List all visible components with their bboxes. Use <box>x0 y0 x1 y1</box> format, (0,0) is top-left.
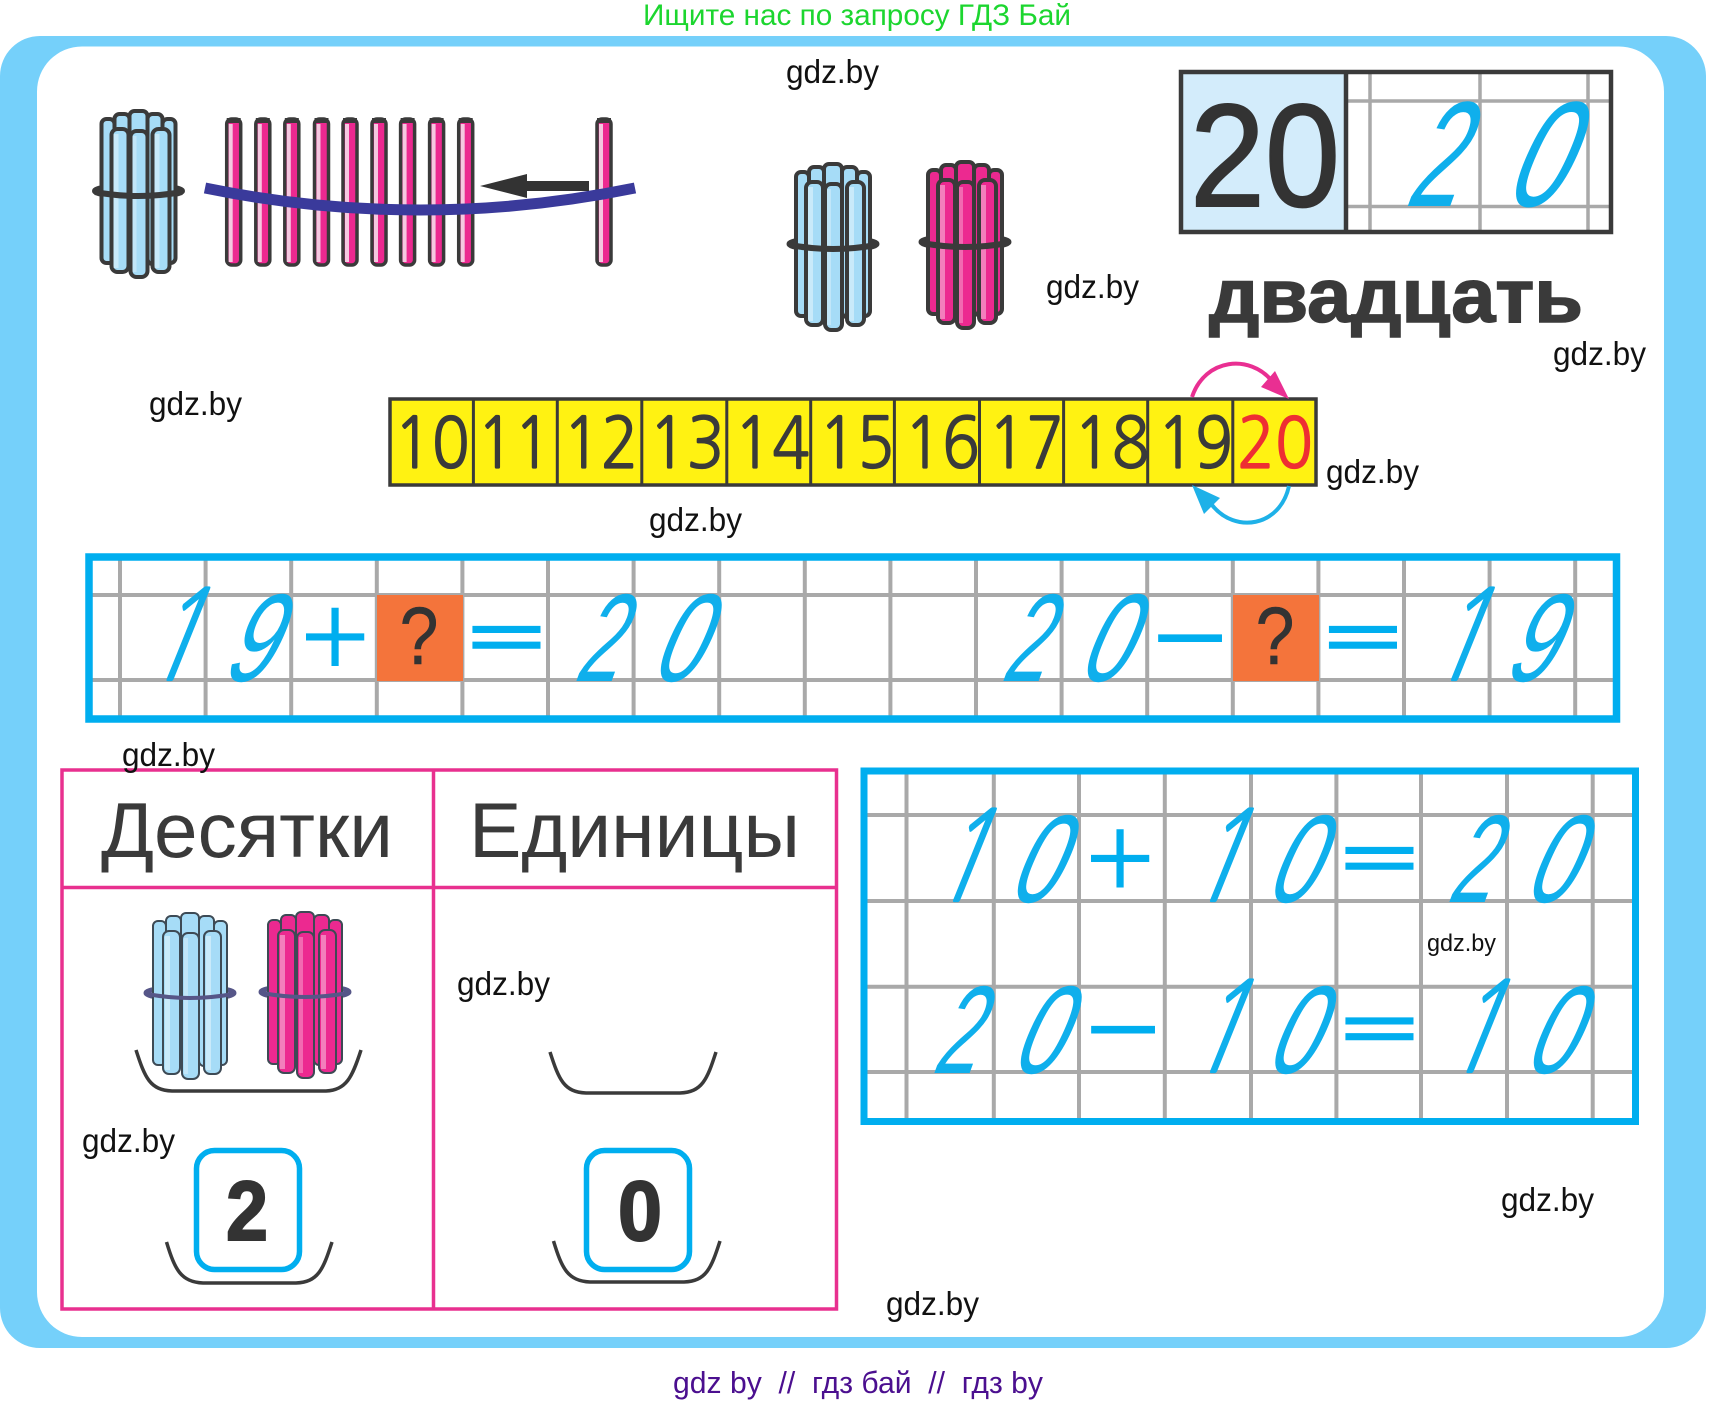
rods illustration: bundle, ten loose rods, arrow <box>94 111 635 277</box>
equation: 20 - ? = 19: − <box>1152 564 1228 713</box>
icon: pink bundle <box>921 162 1009 328</box>
equation: 10 + 10 = 20 <box>919 789 1619 930</box>
grid lines <box>1346 72 1611 232</box>
icon: single pink rod <box>597 118 611 265</box>
bracket under digit 0 <box>554 1241 720 1282</box>
panel border <box>89 557 1616 719</box>
strip numbers: 20 <box>1237 409 1313 479</box>
heading: units: Единицы <box>469 786 800 874</box>
equation: 20 - ? = 19: 2 <box>989 568 1084 709</box>
watermarks: gdz.by <box>1553 335 1646 372</box>
bracket under bundles <box>136 1050 361 1091</box>
equation: 19 + ? = 20: + <box>300 568 370 705</box>
equation: 20 - 10 = 10: 1 <box>1176 966 1280 1091</box>
grid lines <box>864 771 1635 1121</box>
icon: blue bundle of ten <box>94 111 182 277</box>
icon: nine pink rods <box>227 118 473 265</box>
arrow: blue backward hop <box>1192 485 1289 523</box>
watermarks: gdz.by <box>649 501 742 538</box>
watermarks: gdz.by <box>1326 453 1419 490</box>
grid lines <box>89 557 1616 719</box>
equation: 20 - 10 = 10: 2 <box>920 960 1015 1101</box>
equation: 20 - ? = 19: 0 <box>1063 569 1173 708</box>
orange unknown box, right <box>1233 595 1319 681</box>
equation: 20 - 10 = 10: 0 <box>1250 961 1361 1100</box>
equation: 10 + 10 = 20: 2 <box>1435 789 1530 930</box>
strip numbers: 19 <box>1157 409 1233 479</box>
equation: 10 + 10 = 20: 1 <box>1176 795 1280 920</box>
strip numbers: 13 <box>649 409 725 479</box>
equation: 10 + 10 = 20: 0 <box>1509 790 1619 929</box>
watermarks: gdz.by <box>82 1122 175 1159</box>
equation: 20 - 10 = 10: − <box>1085 956 1161 1104</box>
panel: equations 10 + 10 = 20 and 20 - 10 = 10 <box>864 771 1636 1122</box>
word: twenty: двадцать <box>1209 254 1583 339</box>
two bundles: blue and pink <box>789 162 1009 330</box>
equation: 19 + ? = 20: 9 <box>207 569 318 708</box>
equation: 20 - 10 = 10: 0 <box>996 961 1106 1100</box>
strip numbers: 11 <box>477 409 551 479</box>
icon: blue bundle <box>789 164 877 330</box>
equation: 20 - 10 = 10: 0 <box>1509 961 1619 1100</box>
curved purple stroke <box>205 188 635 210</box>
bracket under digit 2 <box>166 1242 332 1283</box>
strip numbers: 12 <box>563 409 639 479</box>
equation: 20 - ? = 19: 9 <box>1489 569 1599 708</box>
number card 20 <box>1181 71 1619 239</box>
orange unknown box, left <box>377 595 463 681</box>
strip numbers: 18 <box>1074 409 1150 479</box>
equation: 19 + ? = 20: 0 <box>636 569 746 708</box>
equation: 20 - 10 = 10: = <box>1342 992 1417 1063</box>
card: digit 2: 2 <box>226 1164 268 1258</box>
strip background <box>390 399 1316 485</box>
handwritten number: 2 <box>1391 71 1504 238</box>
equation: 20 - 10 = 10 <box>920 956 1619 1104</box>
panel: tens and units table <box>62 770 836 1309</box>
equation: 20 - 10 = 10: 1 <box>1433 966 1536 1091</box>
panel: equations 19 + ? = 20 and 20 - ? = 19 <box>89 557 1616 719</box>
strip numbers: 14 <box>734 409 810 479</box>
card: digit 2 <box>196 1150 300 1270</box>
watermarks: gdz.by <box>1046 268 1139 305</box>
equation: 19 + ? = 20 <box>133 568 746 709</box>
strip numbers: 15 <box>819 409 895 479</box>
handwritten number: 0 <box>1486 71 1619 239</box>
arrow: pink forward hop <box>1192 364 1289 399</box>
watermarks: gdz.by <box>1427 930 1496 957</box>
printed 20 cell <box>1182 72 1346 232</box>
equation: 10 + 10 = 20: 0 <box>1250 790 1361 929</box>
card frame <box>1181 72 1611 232</box>
watermarks: gdz.by <box>886 1285 979 1322</box>
equation: 19 + ? = 20: = <box>469 601 544 672</box>
card: digit 0: 0 <box>618 1164 662 1258</box>
card: digit 0 <box>586 1150 690 1270</box>
strip numbers <box>394 409 1313 479</box>
watermarks: gdz.by <box>786 53 879 90</box>
panel border <box>864 771 1636 1122</box>
equation: 10 + 10 = 20: + <box>1085 790 1155 926</box>
equation: 20 - ? = 19: ? <box>1256 591 1294 682</box>
equation: 10 + 10 = 20: 0 <box>993 790 1103 929</box>
handwritten number <box>1391 71 1619 239</box>
equation: 20 - ? = 19 <box>989 564 1599 713</box>
footer text: gdz by // гдз бай // гдз by <box>673 1365 1043 1400</box>
printed number: 20 <box>1190 74 1340 237</box>
equation: 19 + ? = 20: ? <box>400 591 438 682</box>
equation: 10 + 10 = 20: = <box>1342 822 1417 893</box>
arrow pointing left <box>480 174 589 198</box>
strip numbers: 10 <box>394 409 470 479</box>
watermarks: gdz.by <box>122 736 215 773</box>
strip numbers: 16 <box>904 409 980 479</box>
strip numbers: 17 <box>988 409 1064 479</box>
equation: 19 + ? = 20: 1 <box>133 574 236 699</box>
bracket in units column <box>550 1052 716 1093</box>
watermarks: gdz.by <box>457 965 550 1002</box>
watermarks: gdz.by <box>1501 1181 1594 1218</box>
table lines <box>62 770 836 1309</box>
equation: 20 - ? = 19: = <box>1325 601 1401 672</box>
icon: two bundles in tens column <box>146 912 349 1079</box>
equation: 10 + 10 = 20: 1 <box>919 795 1023 920</box>
heading: tens: Десятки <box>101 786 393 874</box>
watermarks: gdz.by <box>149 385 242 422</box>
number strip 10 to 20 <box>390 364 1316 523</box>
equation: 19 + ? = 20: 2 <box>562 568 657 709</box>
equation: 20 - ? = 19: 1 <box>1417 574 1521 699</box>
